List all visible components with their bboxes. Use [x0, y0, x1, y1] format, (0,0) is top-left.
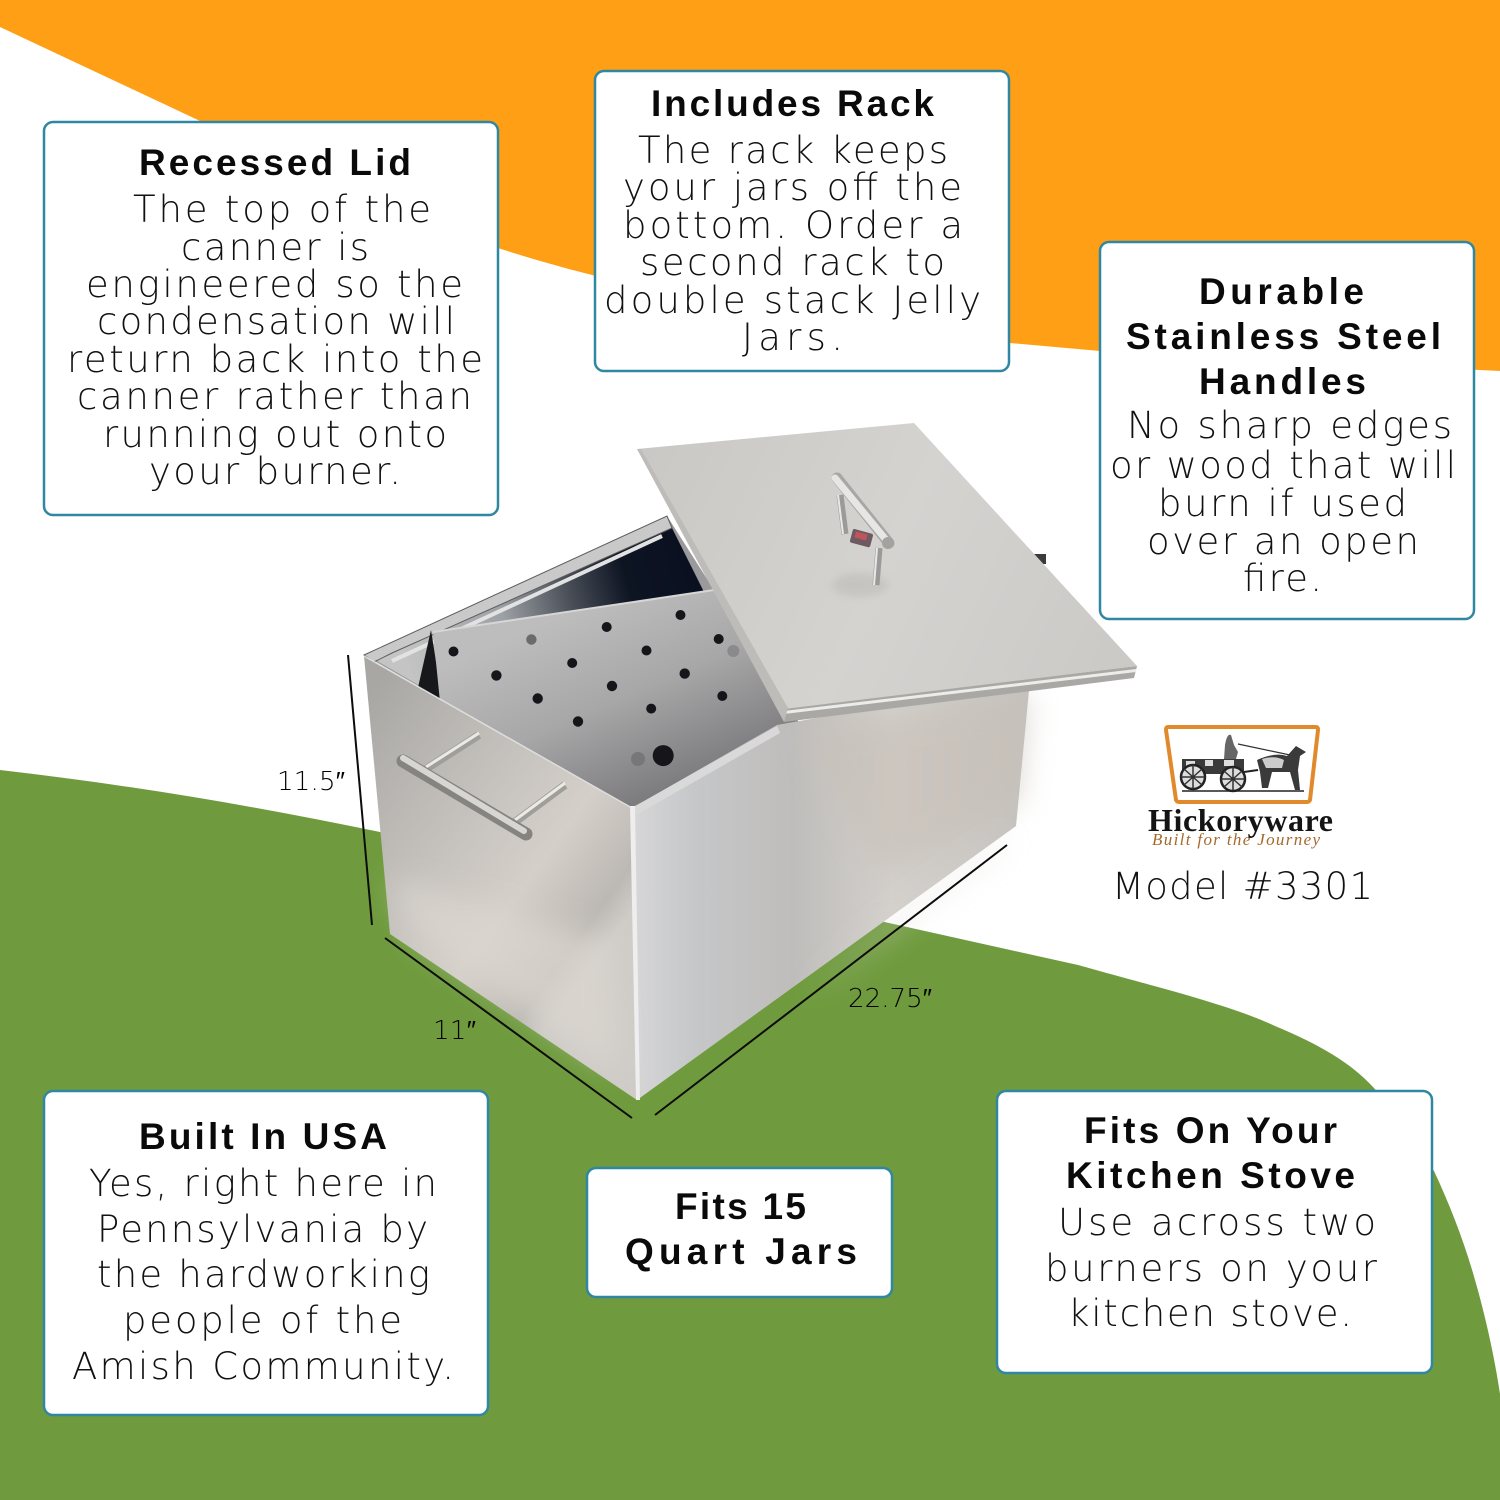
card [1100, 242, 1474, 619]
handle nub behind lid [1034, 554, 1046, 564]
lid handle [835, 478, 894, 585]
body text [67, 188, 483, 493]
heading [1066, 1110, 1355, 1196]
panel: durable handles [1100, 242, 1474, 619]
lid [637, 423, 1137, 722]
body text: Amish Community. [72, 1345, 454, 1388]
body text: people of the [123, 1299, 402, 1342]
heading: Durable [1199, 271, 1364, 312]
panel: built in usa [44, 1091, 488, 1415]
body text: or wood that will [1110, 444, 1456, 487]
body text: engineered so the [86, 263, 463, 306]
body text: The top of the [133, 188, 431, 231]
panel: fits 15 quart jars [587, 1168, 892, 1297]
body text: canner is [181, 226, 369, 269]
dimension label: 11: 11″ [433, 1016, 476, 1046]
panel: fits on your kitchen stove [997, 1091, 1432, 1373]
body text: double stack Jelly [604, 279, 981, 322]
body text: over an open [1147, 520, 1419, 563]
logo: hickoryware [1148, 727, 1333, 849]
inner reflection [392, 536, 662, 661]
brand name: Hickoryware [1148, 802, 1333, 838]
interior base [364, 516, 800, 808]
right box face [632, 680, 1030, 1100]
body text [1110, 404, 1456, 600]
rim [364, 516, 672, 662]
body text: Jars. [742, 316, 843, 359]
green background shape [0, 770, 1500, 1500]
heading [1126, 271, 1441, 402]
body text: the hardworking [97, 1253, 430, 1296]
card [595, 71, 1009, 371]
heading: Includes Rack [651, 83, 934, 124]
body text: return back into the [67, 338, 483, 381]
heading: Handles [1199, 361, 1366, 402]
tagline: Built for the Journey [1152, 830, 1320, 849]
model number: Model #3301 [1112, 865, 1373, 908]
dimension label: 22.75: 22.75″ [848, 984, 932, 1014]
body text: The rack keeps [638, 129, 948, 172]
product: stainless canner [364, 423, 1137, 1100]
body text [1045, 1201, 1378, 1335]
lid handle shadow [832, 573, 888, 597]
body text: running out onto [103, 413, 447, 456]
heading: Stainless Steel [1126, 316, 1441, 357]
dimension line: width [655, 845, 1007, 1115]
orange background shape [0, 0, 1500, 371]
icon: horse and wagon [1181, 735, 1306, 791]
card [587, 1168, 892, 1297]
rack holes [448, 610, 739, 766]
body text: condensation will [97, 300, 455, 343]
body text: your burner. [149, 450, 401, 493]
rack plate [433, 590, 800, 808]
body text: burners on your [1045, 1247, 1378, 1290]
bracket [417, 630, 442, 700]
body text: fire. [1243, 557, 1322, 600]
heading: Kitchen Stove [1066, 1155, 1355, 1196]
body text: your jars off the [623, 166, 962, 209]
body text: No sharp edges [1127, 404, 1452, 447]
side handle [403, 733, 565, 834]
dimension line: depth [385, 938, 632, 1118]
body text: canner rather than [77, 375, 472, 418]
left box face [364, 656, 640, 1100]
dimension label: 11.5: 11.5″ [277, 767, 345, 797]
body text: burn if used [1158, 482, 1407, 525]
card [44, 122, 498, 515]
body text: bottom. Order a [623, 204, 963, 247]
body text: kitchen stove. [1068, 1292, 1352, 1335]
heading [625, 1186, 857, 1272]
body text: Pennsylvania by [97, 1208, 428, 1251]
dimension line: height [348, 655, 372, 925]
body text: Use across two [1058, 1201, 1376, 1244]
heading: Fits On Your [1084, 1110, 1337, 1151]
panel: includes rack [595, 71, 1009, 371]
heading: Fits 15 [675, 1186, 806, 1227]
body text [72, 1162, 454, 1388]
heading: Recessed Lid [139, 142, 411, 183]
body text: Yes, right here in [89, 1162, 437, 1205]
panel: recessed lid [44, 122, 498, 515]
card [44, 1091, 488, 1415]
heading: Quart Jars [625, 1231, 857, 1272]
interior wall [372, 518, 708, 808]
body text: second rack to [640, 241, 945, 284]
heading: Built In USA [139, 1116, 387, 1157]
logo frame [1166, 727, 1318, 802]
card [997, 1091, 1432, 1373]
body text [604, 129, 981, 359]
